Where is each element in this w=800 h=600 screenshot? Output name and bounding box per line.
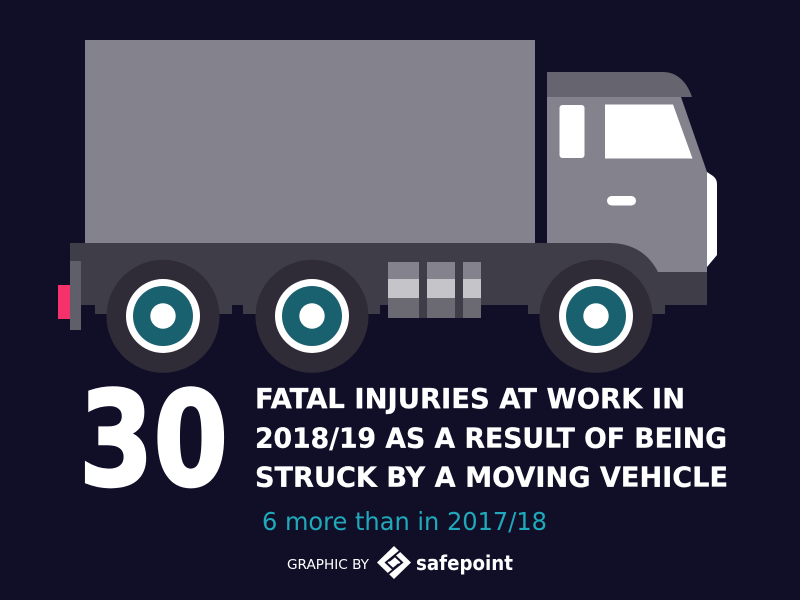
headline: 2018/19 AS A RESULT OF BEING: [255, 422, 727, 454]
red rear light: [58, 285, 70, 319]
safepoint logo mark: [377, 546, 411, 579]
rear light bar: [70, 261, 81, 330]
cab roof: [547, 72, 692, 97]
side window: [560, 105, 584, 158]
headline: [255, 383, 728, 494]
truck illustration: [58, 40, 717, 373]
big number: 30: [79, 363, 228, 516]
credit label: GRAPHIC BY: [287, 557, 370, 573]
cab body: [547, 97, 707, 275]
headline: STRUCK BY A MOVING VEHICLE: [255, 462, 728, 494]
front wheel: [540, 260, 652, 373]
credit: [287, 546, 513, 579]
windscreen: [605, 104, 692, 158]
cab: [547, 72, 717, 275]
door handle: [607, 196, 636, 206]
cargo box: [85, 40, 535, 243]
rear wheel 2: [256, 260, 368, 373]
comparison note: 6 more than in 2017/18: [262, 507, 547, 536]
rear wheel 1: [106, 260, 220, 373]
chassis: [70, 243, 707, 314]
fuel tank: [388, 262, 481, 318]
safepoint wordmark: safepoint: [416, 551, 513, 575]
headline: FATAL INJURIES AT WORK IN: [255, 383, 685, 415]
front light: [707, 172, 717, 267]
